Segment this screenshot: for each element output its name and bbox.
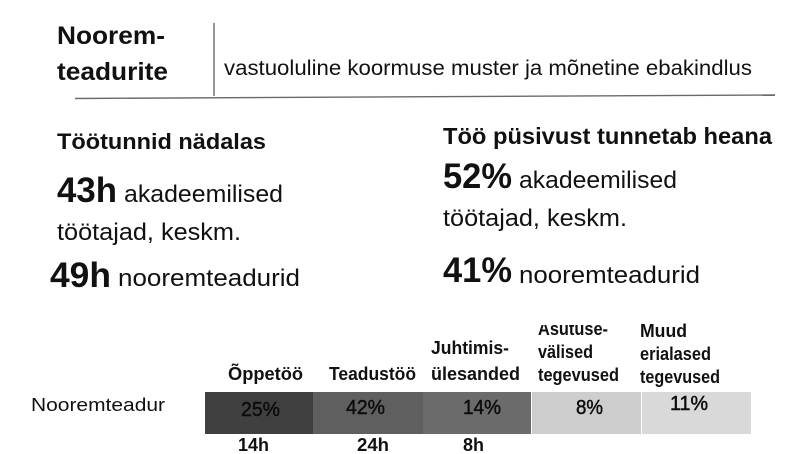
heading: working hours: Töötunnid nädalas xyxy=(57,129,266,154)
category labels: erialased xyxy=(640,344,711,364)
panel: working hours xyxy=(50,129,300,295)
percentages xyxy=(241,393,708,421)
percentages: 11% xyxy=(670,393,708,415)
stat: 49h junior researchers: nooremteadurid xyxy=(118,265,300,292)
stat: 41% junior researchers: 41% xyxy=(443,251,512,290)
stat: 43h academic staff: töötajad, keskm. xyxy=(57,219,241,246)
heading: job security: Töö püsivust tunnetab heana xyxy=(443,123,772,149)
percentages: 14% xyxy=(463,397,501,419)
stat: 43h academic staff xyxy=(57,171,283,246)
category labels: tegevused xyxy=(640,367,720,387)
category labels: Õppetöö xyxy=(228,363,303,384)
category labels: Asutuse- xyxy=(538,319,608,339)
title: teadurite xyxy=(57,58,168,86)
category labels: Teadustöö xyxy=(329,364,416,384)
stat: 49h junior researchers: 49h xyxy=(50,256,111,295)
row label: Nooremteadur xyxy=(31,395,165,415)
percentages: 42% xyxy=(346,397,385,419)
category labels: tegevused xyxy=(538,365,619,385)
stat: 52% academic staff: 52% xyxy=(443,157,512,196)
category labels: ülesanded xyxy=(431,364,520,384)
stat: 52% academic staff: akadeemilised xyxy=(519,167,677,194)
stat: 41% junior researchers: nooremteadurid xyxy=(519,262,700,289)
category labels: Muud xyxy=(640,321,687,341)
stacked bar chart: junior researcher workload xyxy=(31,319,751,454)
stat: 49h junior researchers xyxy=(50,256,300,295)
percentages: 25% xyxy=(241,399,280,421)
category labels: Juhtimis- xyxy=(431,338,509,358)
stat: 43h academic staff: 43h xyxy=(57,171,117,210)
bar segments xyxy=(205,392,751,434)
stat: 52% academic staff xyxy=(443,157,677,232)
subtitle: vastuoluline koormuse muster ja mõnetine ebakindlus xyxy=(224,57,752,80)
stat: 41% junior researchers xyxy=(443,251,700,290)
category labels: välised xyxy=(538,342,593,362)
stat: 43h academic staff: akadeemilised xyxy=(124,181,283,208)
stat: 52% academic staff: töötajad, keskm. xyxy=(443,205,627,232)
header divider lines xyxy=(75,23,775,98)
percentages: 8% xyxy=(576,397,603,419)
title: Noorem- xyxy=(57,22,165,50)
title xyxy=(57,22,168,86)
category labels xyxy=(228,319,720,387)
panel: job security xyxy=(443,123,772,290)
hours xyxy=(238,435,484,454)
